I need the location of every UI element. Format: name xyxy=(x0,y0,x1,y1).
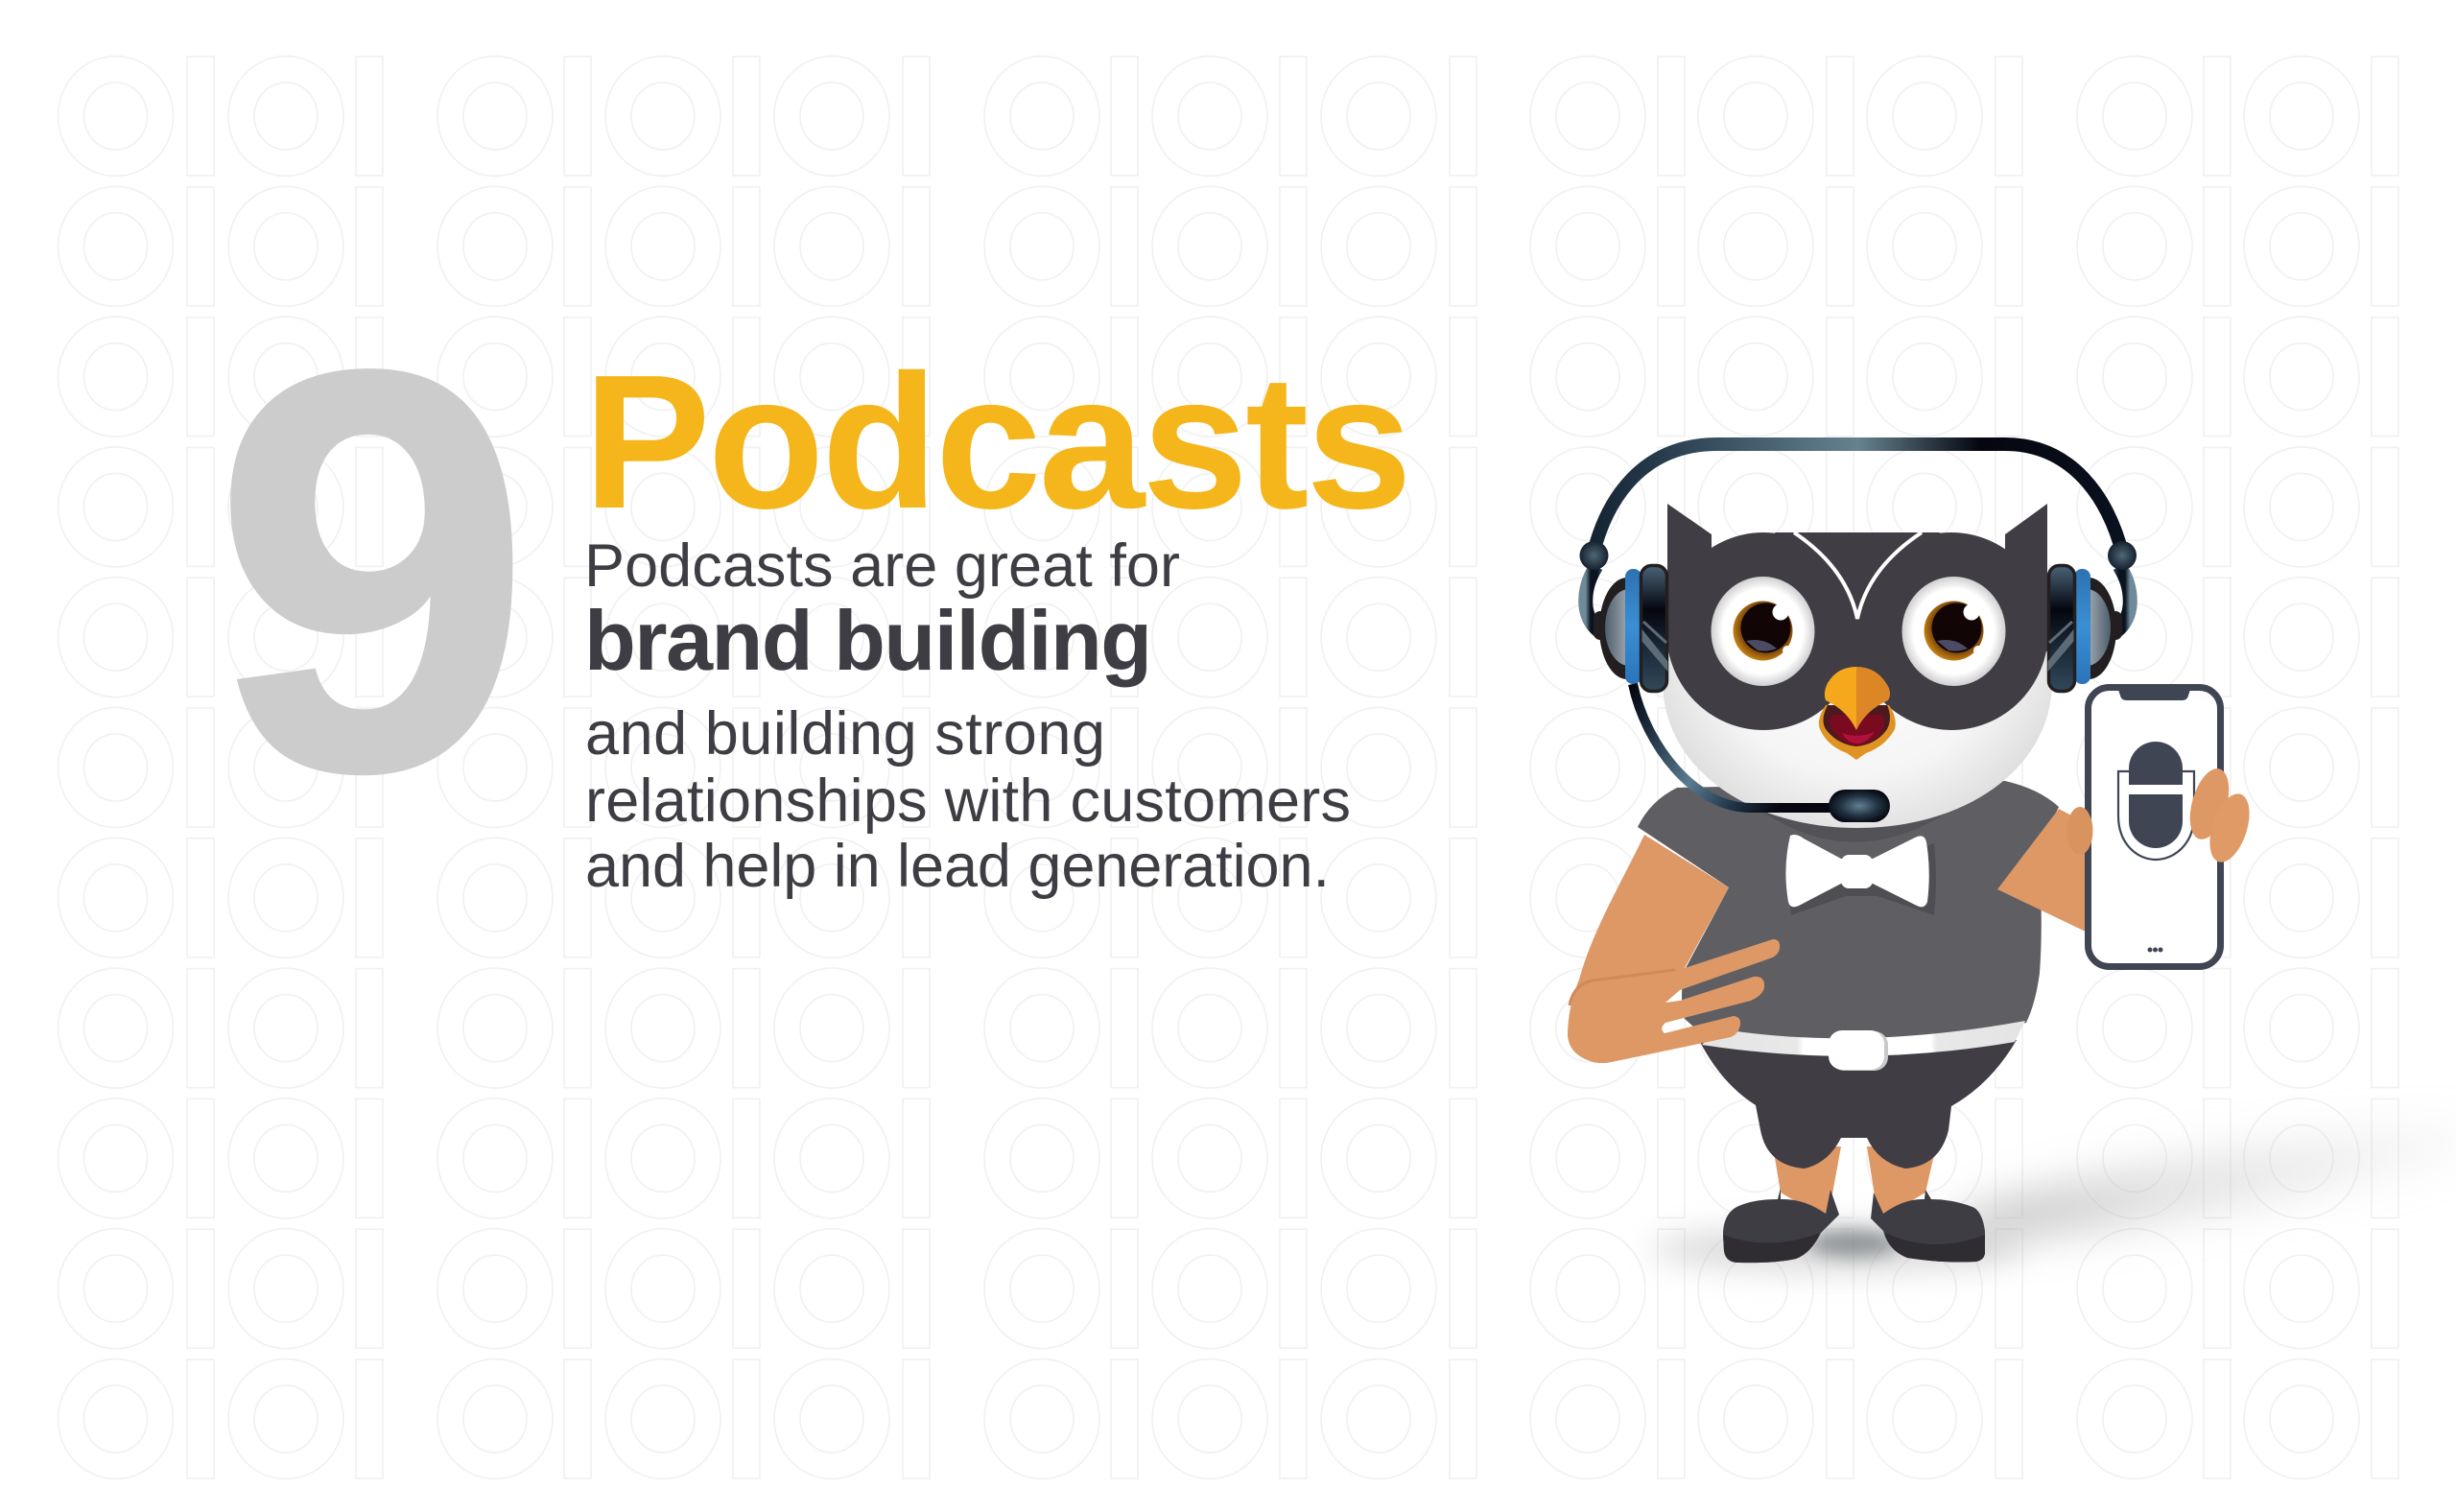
right ear cup xyxy=(2049,566,2130,691)
owl character xyxy=(1568,444,2456,1272)
bow tie xyxy=(1785,835,1936,915)
shorts xyxy=(1700,1040,2017,1169)
buckle xyxy=(1830,1031,1888,1071)
line: and help in lead generation: and help in lead generation. xyxy=(585,833,1330,900)
microphone boom xyxy=(1633,684,1890,822)
mic head xyxy=(1829,790,1890,822)
beak and mouth xyxy=(1819,667,1896,760)
body text xyxy=(584,532,1351,900)
notch xyxy=(2118,690,2190,700)
title: Podcasts xyxy=(583,336,1412,549)
phone xyxy=(2088,687,2220,967)
microphone icon xyxy=(2118,742,2194,860)
right shoe xyxy=(1871,1190,1985,1263)
number 9: 9 xyxy=(213,254,531,888)
shirt xyxy=(1638,781,2059,1041)
line: and building strong: and building strong xyxy=(585,700,1105,768)
right arm xyxy=(1997,809,2090,933)
shoes xyxy=(1723,1188,1985,1263)
right hand fingers xyxy=(2066,765,2257,867)
left eye xyxy=(1712,577,1815,686)
belt xyxy=(1702,1021,2025,1071)
face mask xyxy=(1666,504,2048,730)
left shoe xyxy=(1723,1188,1839,1263)
neck shadow xyxy=(1736,768,1988,842)
ground shadow xyxy=(1650,1107,2456,1272)
line: Podcasts are great for: Podcasts are great for xyxy=(584,532,1180,600)
brow lines xyxy=(1794,532,1922,619)
left ear cup xyxy=(1586,566,1667,691)
line: brand building: brand building xyxy=(584,593,1152,688)
headset knobs xyxy=(1579,541,2137,570)
head xyxy=(1663,533,2052,828)
line: relationships with customers: relationships with customers xyxy=(585,768,1351,835)
home dots xyxy=(2147,948,2162,952)
legs xyxy=(1773,1146,1936,1220)
right eye xyxy=(1901,577,2005,686)
left arm and hand xyxy=(1568,835,1780,1063)
headband xyxy=(1594,444,2122,553)
